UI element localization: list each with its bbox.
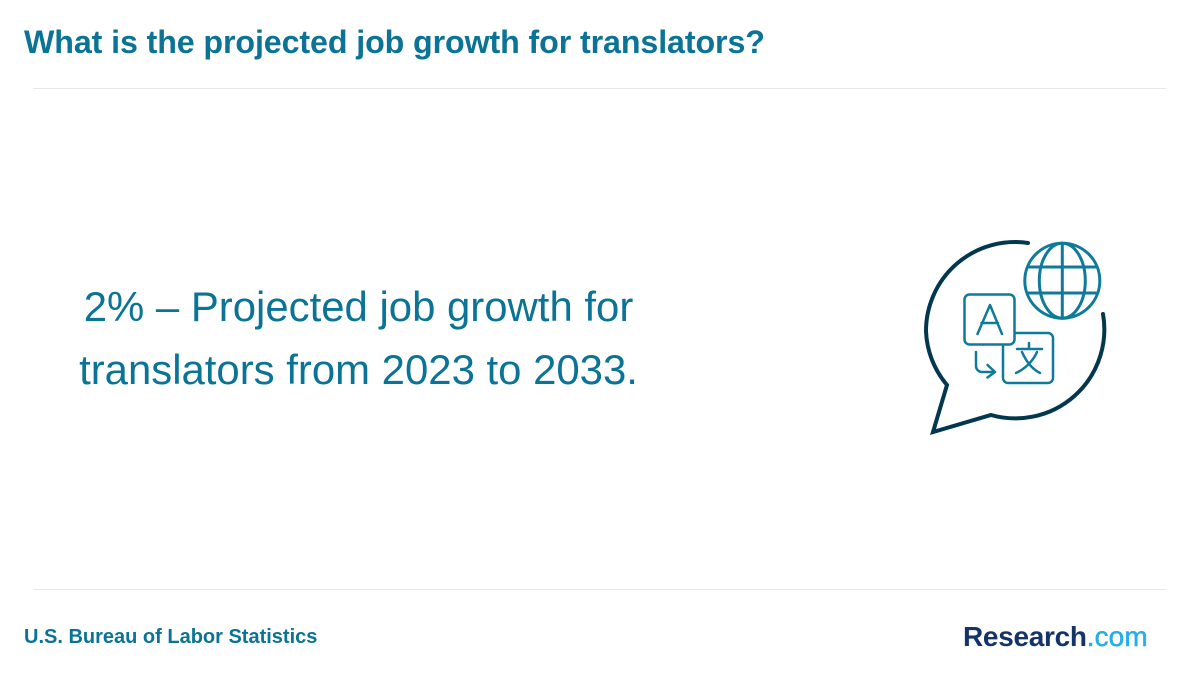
icon: speech bubble with translation symbols and globe [924, 240, 1106, 435]
logo: Research.com: Research.com [963, 621, 1148, 652]
title: What is the projected job growth for translators? [24, 24, 765, 60]
source: U.S. Bureau of Labor Statistics [24, 626, 317, 648]
statistic text [79, 283, 638, 393]
speech bubble outline [926, 242, 1104, 432]
translation card: character wen [1003, 333, 1053, 383]
arrow [976, 352, 995, 378]
statistic text: 2% – Projected job growth for [84, 283, 633, 330]
statistic text: translators from 2023 to 2033. [79, 346, 638, 393]
translation card: letter A [964, 294, 1014, 344]
globe [1025, 243, 1100, 318]
